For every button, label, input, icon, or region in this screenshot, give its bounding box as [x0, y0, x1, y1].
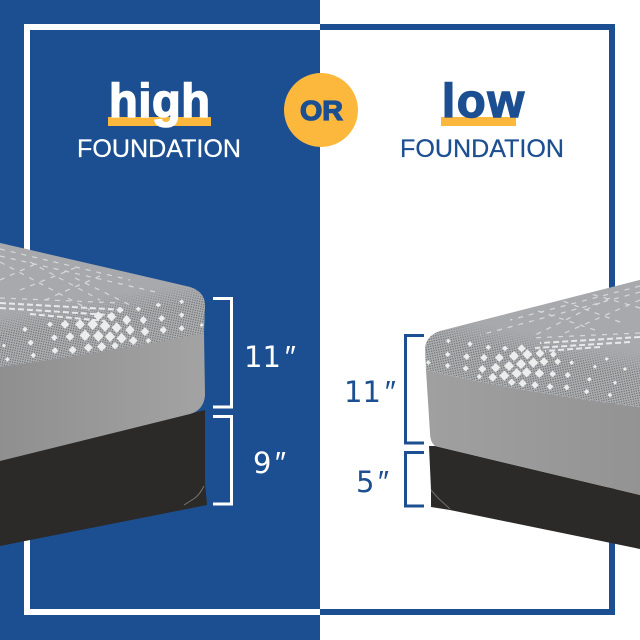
mattress: high foundation: [0, 240, 210, 546]
dimension: 11 inch mattress, high side: 11″: [244, 339, 295, 374]
heading: high foundation: high: [109, 74, 210, 127]
foundation box: 9 inch: [0, 410, 207, 546]
mattress top with mesh and diamond pattern: [0, 240, 210, 370]
white frame on blue side: [27, 27, 320, 612]
badge: OR: OR: [300, 95, 343, 126]
heading: low foundation: [400, 74, 564, 163]
heading: low foundation: low: [442, 74, 524, 127]
panel: high foundation blue background: [0, 0, 320, 640]
mattress top with mesh and diamond pattern: [420, 275, 640, 410]
panel: low foundation white background: [320, 0, 640, 640]
dimension: 9 inch foundation, high side: 9″: [253, 445, 285, 480]
foundation box: 5 inch: [429, 446, 640, 549]
mattress: low foundation: [420, 275, 640, 549]
heading: high foundation: FOUNDATION: [77, 135, 241, 163]
dimension: 11 inch mattress, low side: [344, 336, 424, 443]
dimension: 5 inch foundation, low side: 5″: [356, 464, 388, 499]
dimension: 11 inch mattress, low side: 11″: [344, 374, 395, 409]
dimension: 9 inch foundation, high side: [213, 416, 285, 504]
dimension: 5 inch foundation, low side: [356, 452, 424, 506]
mattress side: [426, 370, 640, 495]
heading: low foundation: FOUNDATION: [400, 135, 564, 163]
mattress side: [0, 333, 205, 461]
badge: OR: [284, 73, 358, 147]
heading: high foundation: [77, 74, 241, 163]
blue frame on white side: [320, 27, 612, 612]
dimension: 11 inch mattress, high side: [213, 298, 295, 407]
